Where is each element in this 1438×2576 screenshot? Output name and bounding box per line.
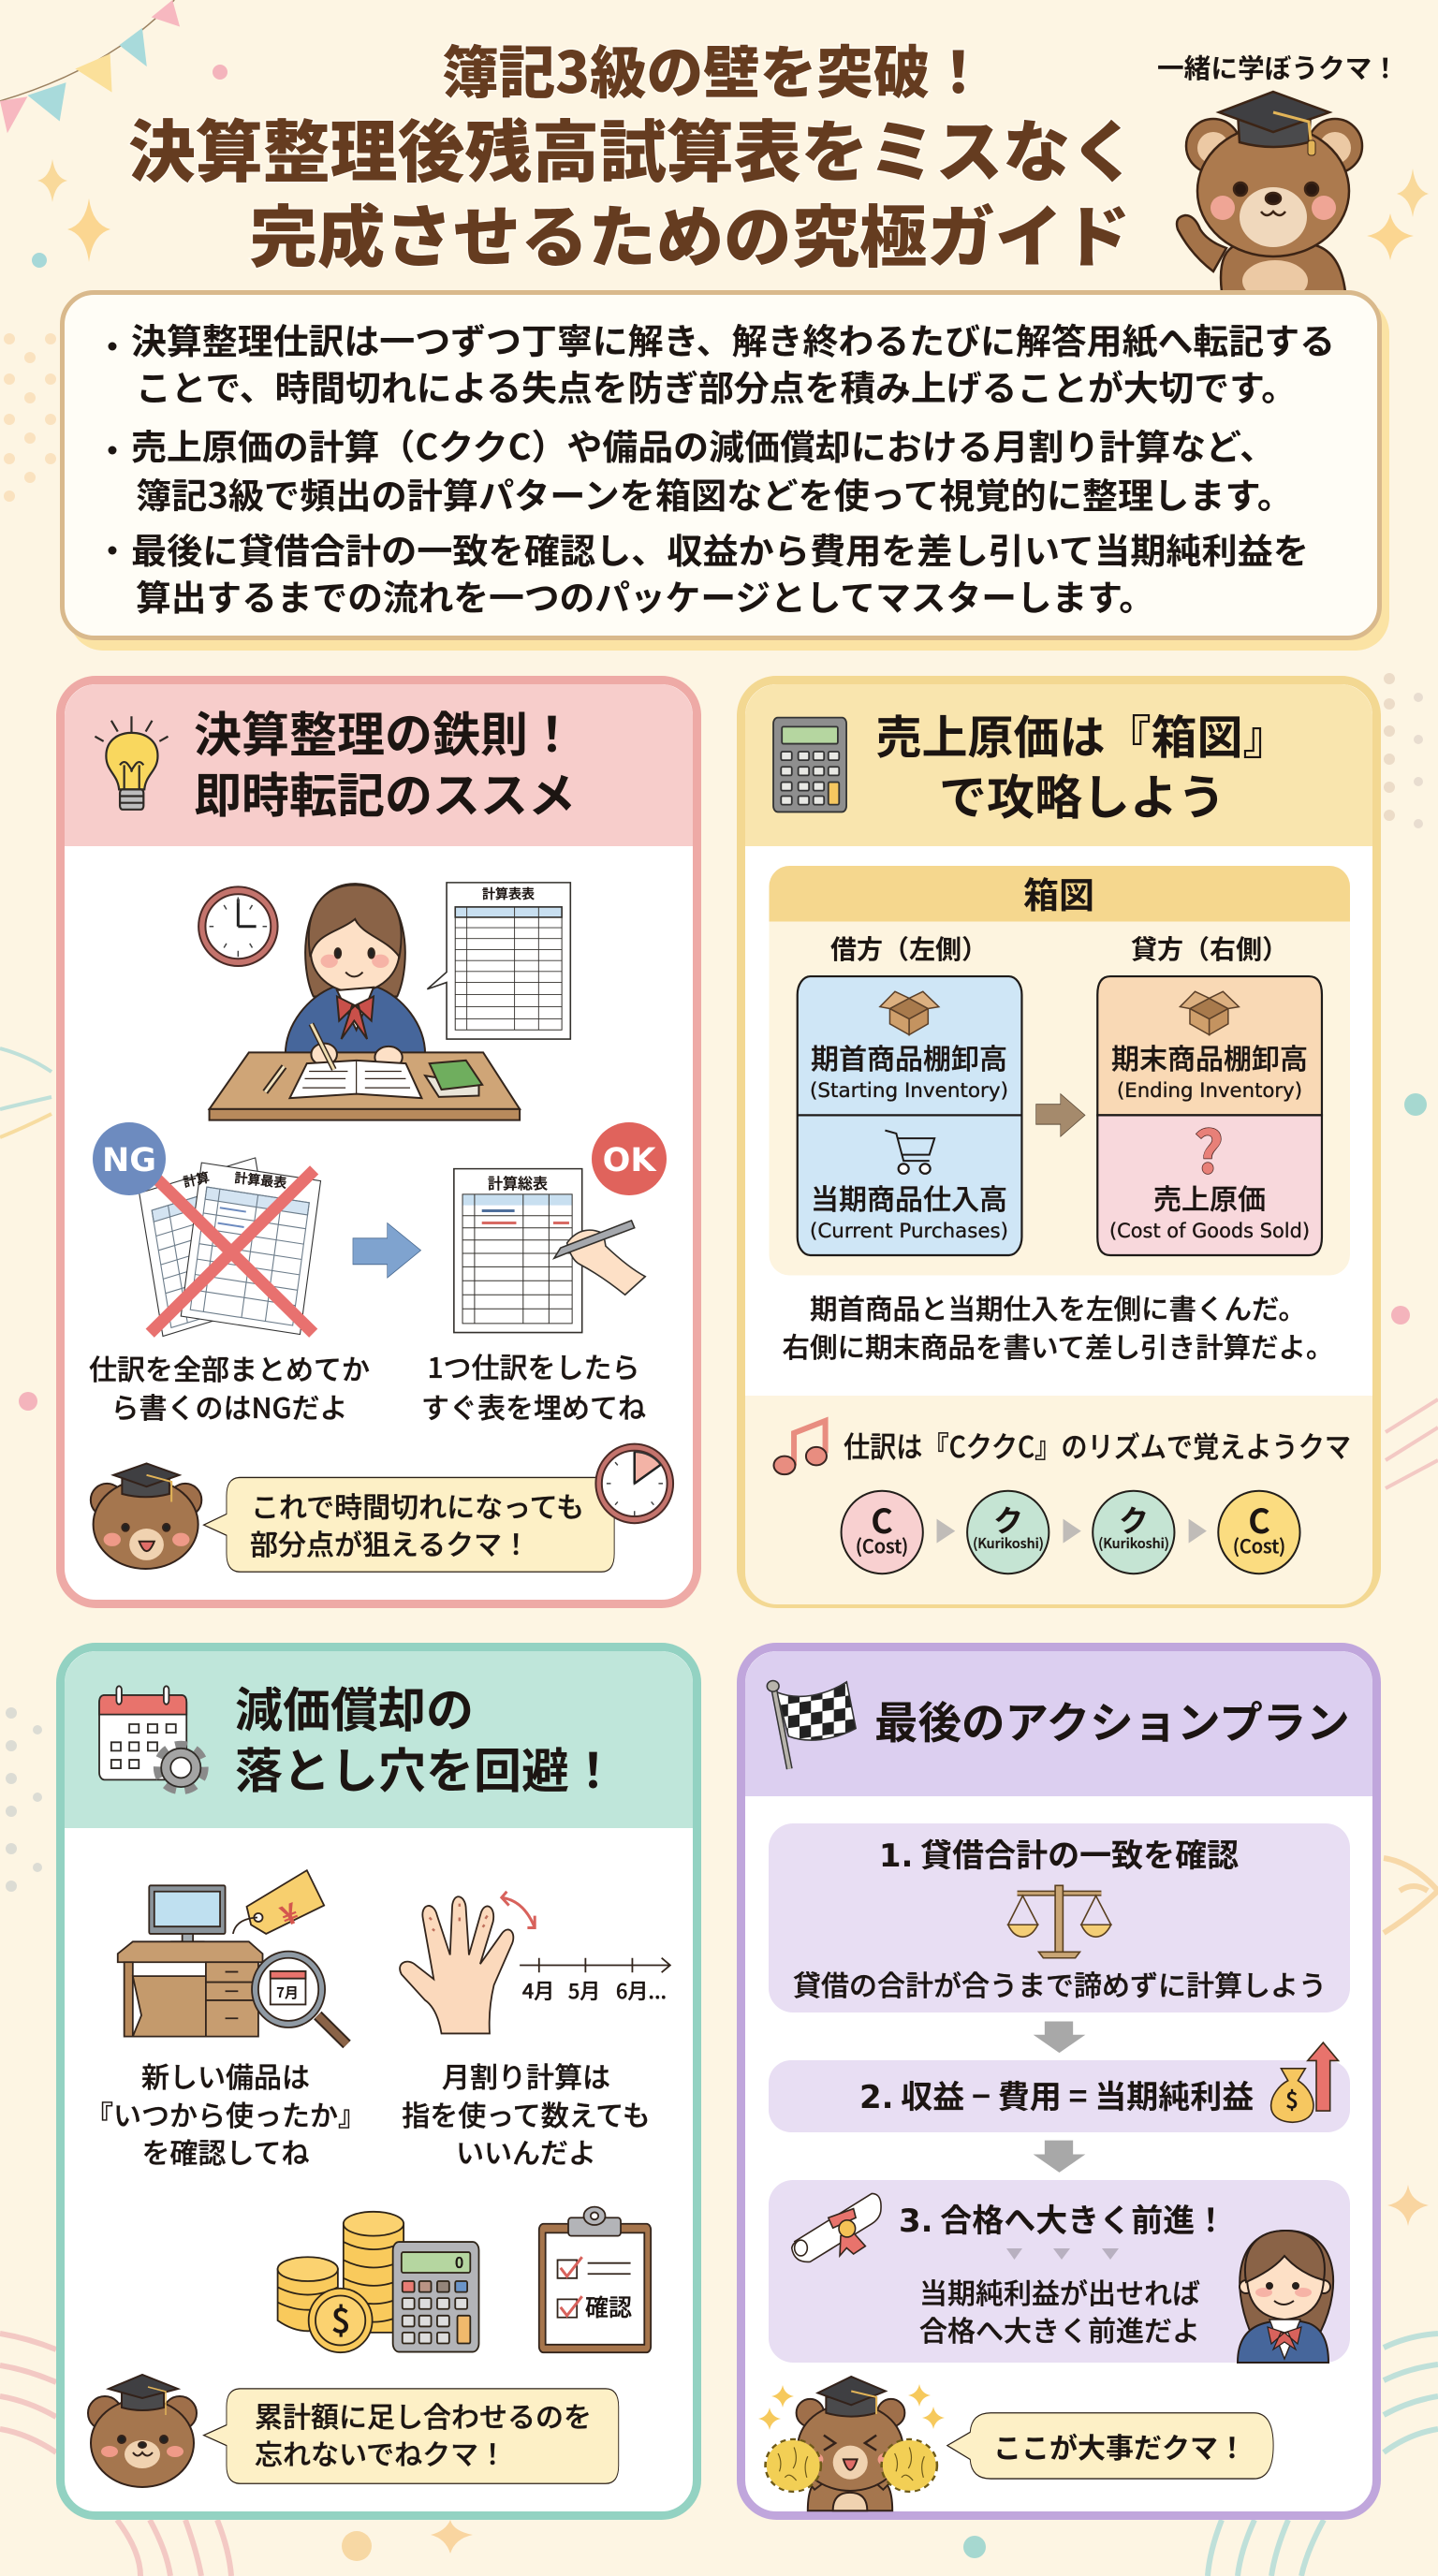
heading: 売上原価は『箱図』 xyxy=(875,701,1289,768)
step 2 xyxy=(769,2042,1350,2132)
illustration: coins and calculator xyxy=(278,2212,478,2352)
illustration: new equipment xyxy=(118,1870,347,2044)
rhythm flow: (Kurikoshi) xyxy=(973,1533,1044,1553)
rhythm flow: (Cost) xyxy=(1233,1531,1285,1559)
box diagram: 貸方（右側） xyxy=(1131,929,1288,967)
rhythm flow: C xyxy=(871,1495,893,1544)
box: credit side: 期末商品棚卸高 xyxy=(1111,1036,1308,1077)
captions: いいんだよ xyxy=(456,2130,596,2172)
icon: checklist clipboard: 確認 xyxy=(585,2290,632,2323)
step 1 xyxy=(769,1823,1350,2012)
NG badge xyxy=(93,1122,166,1195)
icon: calculator xyxy=(773,718,846,812)
speech bubble xyxy=(947,2413,1273,2479)
box: credit side: (Cost of Goods Sold) xyxy=(1109,1220,1310,1242)
panel: immediate posting xyxy=(60,680,697,1604)
illustration: NG stacked sheets xyxy=(139,1158,321,1337)
mascot bear with cap xyxy=(1177,92,1362,301)
NG sheet titles: 計算 xyxy=(182,1168,211,1192)
captions: 『いつから使ったか』 xyxy=(85,2093,366,2134)
heading xyxy=(875,701,1289,828)
captions: を確認してね xyxy=(141,2130,310,2172)
step 3 xyxy=(769,2180,1350,2363)
heading: 即時転記のススメ xyxy=(194,757,576,827)
heading: 落とし穴を回避！ xyxy=(235,1733,617,1802)
NG sheet titles xyxy=(182,1168,287,1193)
icon: wall clock xyxy=(198,886,278,966)
bullet: summary 2: 売上原価の計算（CククC）や備品の減価償却における月割り計算など、 xyxy=(131,418,1275,470)
arrow xyxy=(1034,2022,1085,2053)
box: debit side: (Current Purchases) xyxy=(810,1220,1008,1242)
illustration: worksheet speech xyxy=(427,883,570,1039)
heading xyxy=(194,696,576,827)
panel: action plan xyxy=(741,1647,1376,2516)
title: 決算整理後残高試算表をミスなく xyxy=(128,97,1137,196)
box: credit side: 売上原価 xyxy=(1153,1177,1266,1218)
rhythm flow: ク xyxy=(993,1498,1023,1541)
speech bubble: これで時間切れになっても xyxy=(251,1485,584,1526)
title: 簿記3級の壁を突破！ xyxy=(442,26,987,110)
step 1: 貸借の合計が合うまで諦めずに計算しよう xyxy=(793,1963,1327,2004)
NG sheet titles: 計算最表 xyxy=(233,1168,287,1193)
heading: で攻略しよう xyxy=(939,759,1225,828)
price tag and calendar labels: 7月 xyxy=(276,1983,299,2002)
icon: checklist clipboard xyxy=(539,2207,651,2352)
OK sheet title: 計算総表 xyxy=(488,1171,548,1193)
panel: cost of goods sold xyxy=(741,680,1376,1604)
heading: 減価償却の xyxy=(235,1672,474,1741)
speech bubble: 累計額に足し合わせるのを xyxy=(255,2394,592,2436)
illustration: hand and timeline: 5月 xyxy=(568,1975,600,2005)
box diagram xyxy=(770,866,1350,1275)
bullet: summary 1 xyxy=(109,313,1335,411)
bear speech text: 一緒に学ぼうクマ！ xyxy=(1157,48,1399,86)
box: debit side: 当期商品仕入高 xyxy=(811,1177,1007,1218)
rhythm flow: ク xyxy=(1119,1498,1149,1541)
icon: light bulb xyxy=(95,716,168,810)
panel: summary xyxy=(62,292,1389,651)
bunting xyxy=(0,0,180,133)
heading xyxy=(235,1672,617,1802)
illustration: hand and timeline xyxy=(400,1892,670,2033)
arrow xyxy=(1036,1094,1085,1136)
captions: すぐ表を埋めてね xyxy=(421,1385,646,1427)
illustration: hand and timeline: 4月 xyxy=(522,1975,554,2005)
icon: scales xyxy=(1008,1885,1111,1958)
step 2: $ xyxy=(1285,2082,1299,2115)
box: credit side: ? xyxy=(1194,1105,1224,1190)
bullet: summary 2: 簿記3級で頻出の計算パターンを箱図などを使って視覚的に整理します。 xyxy=(136,467,1293,519)
step 3: 合格へ大きく前進だよ xyxy=(919,2308,1200,2349)
speech bubble: 忘れないでねクマ！ xyxy=(255,2432,506,2473)
captions: 新しい備品は xyxy=(141,2055,310,2096)
rhythm flow: (Kurikoshi) xyxy=(1098,1533,1169,1553)
captions xyxy=(89,1345,646,1427)
explanation xyxy=(782,1288,1334,1366)
arrow xyxy=(1034,2141,1085,2173)
bear xyxy=(91,1463,201,1569)
box: debit side: 期首商品棚卸高 xyxy=(811,1036,1007,1077)
NG badge: NG xyxy=(102,1142,156,1179)
bullet: summary 2 xyxy=(109,418,1293,519)
illustration: hand and timeline: 6月... xyxy=(616,1975,667,2005)
captions: 1つ仕訳をしたら xyxy=(427,1345,640,1386)
captions xyxy=(85,2055,651,2172)
box: credit side: (Ending Inventory) xyxy=(1117,1079,1302,1102)
rhythm flow: C xyxy=(1248,1495,1270,1544)
illustration: coins and calculator: $ xyxy=(331,2294,350,2343)
worksheet title: 計算表表 xyxy=(482,885,535,903)
captions: ら書くのはNGだよ xyxy=(110,1385,348,1427)
bullet: summary 3: 最後に貸借合計の一致を確認し、収益から費用を差し引いて当期純利益を xyxy=(131,522,1309,574)
cheering bear xyxy=(758,2377,945,2510)
box: debit side: (Starting Inventory) xyxy=(810,1079,1008,1102)
illustration: OK worksheet and hand xyxy=(454,1169,645,1333)
icon: checkered flag xyxy=(767,1681,856,1769)
step 2: 2. 収益 − 費用 = 当期純利益 xyxy=(859,2071,1254,2117)
speech bubble: ここが大事だクマ！ xyxy=(993,2425,1246,2466)
step 1: 1. 貸借合計の一致を確認 xyxy=(879,1830,1239,1876)
illustration: coins and calculator: 0 xyxy=(455,2250,463,2273)
price tag and calendar labels: ¥ xyxy=(273,1890,304,1935)
box diagram: 箱図 xyxy=(1023,867,1094,918)
speech bubble: 部分点が狙えるクマ！ xyxy=(250,1522,530,1563)
box diagram: 借方（左側） xyxy=(830,929,988,967)
bear xyxy=(88,2375,197,2487)
captions: 指を使って数えても xyxy=(402,2093,651,2134)
icon: timer clock xyxy=(595,1444,673,1523)
arrow xyxy=(353,1223,421,1278)
bullet: summary 1: 決算整理仕訳は一つずつ丁寧に解き、解き終わるたびに解答用紙へ転記する xyxy=(131,313,1335,364)
icon: money bag and up arrow xyxy=(1271,2042,1338,2122)
explanation: 期首商品と当期仕入を左側に書くんだ。 xyxy=(810,1288,1306,1327)
illustration: student at desk xyxy=(210,884,520,1120)
captions: 月割り計算は xyxy=(442,2055,610,2096)
step 3: 当期純利益が出せれば xyxy=(919,2271,1200,2312)
box: credit side xyxy=(1097,976,1322,1255)
panel: depreciation xyxy=(60,1647,697,2516)
speech bubble xyxy=(204,1477,614,1572)
heading: 最後のアクションプラン xyxy=(874,1689,1350,1751)
red cross xyxy=(150,1170,315,1333)
step 3: 3. 合格へ大きく前進！ xyxy=(899,2195,1226,2241)
bullet: summary 3 xyxy=(109,522,1309,621)
rhythm flow xyxy=(842,1491,1300,1573)
price tag and calendar labels xyxy=(273,1890,304,2002)
speech bubble xyxy=(204,2389,619,2483)
title: 完成させるための究極ガイド xyxy=(249,183,1131,281)
icon: music note xyxy=(773,1421,827,1474)
bullet: summary 3: 算出するまでの流れを一つのパッケージとしてマスターします。 xyxy=(136,569,1154,621)
OK badge xyxy=(592,1122,667,1195)
captions: 仕訳を全部まとめてか xyxy=(89,1347,370,1388)
student bust xyxy=(1238,2231,1333,2363)
rhythm heading: 仕訳は『CククC』のリズムで覚えようクマ xyxy=(844,1424,1351,1466)
bullet: summary 1: ことで、時間切れによる失点を防ぎ部分点を積み上げることが大切です。 xyxy=(136,359,1297,411)
icon: diploma xyxy=(792,2193,881,2261)
rhythm flow: (Cost) xyxy=(856,1531,908,1559)
icon: calendar and gear xyxy=(99,1686,203,1790)
box: debit side xyxy=(798,976,1021,1255)
OK badge: OK xyxy=(603,1142,657,1179)
explanation: 右側に期末商品を書いて差し引き計算だよ。 xyxy=(782,1326,1334,1366)
title xyxy=(128,26,1137,281)
heading: 決算整理の鉄則！ xyxy=(194,696,576,766)
